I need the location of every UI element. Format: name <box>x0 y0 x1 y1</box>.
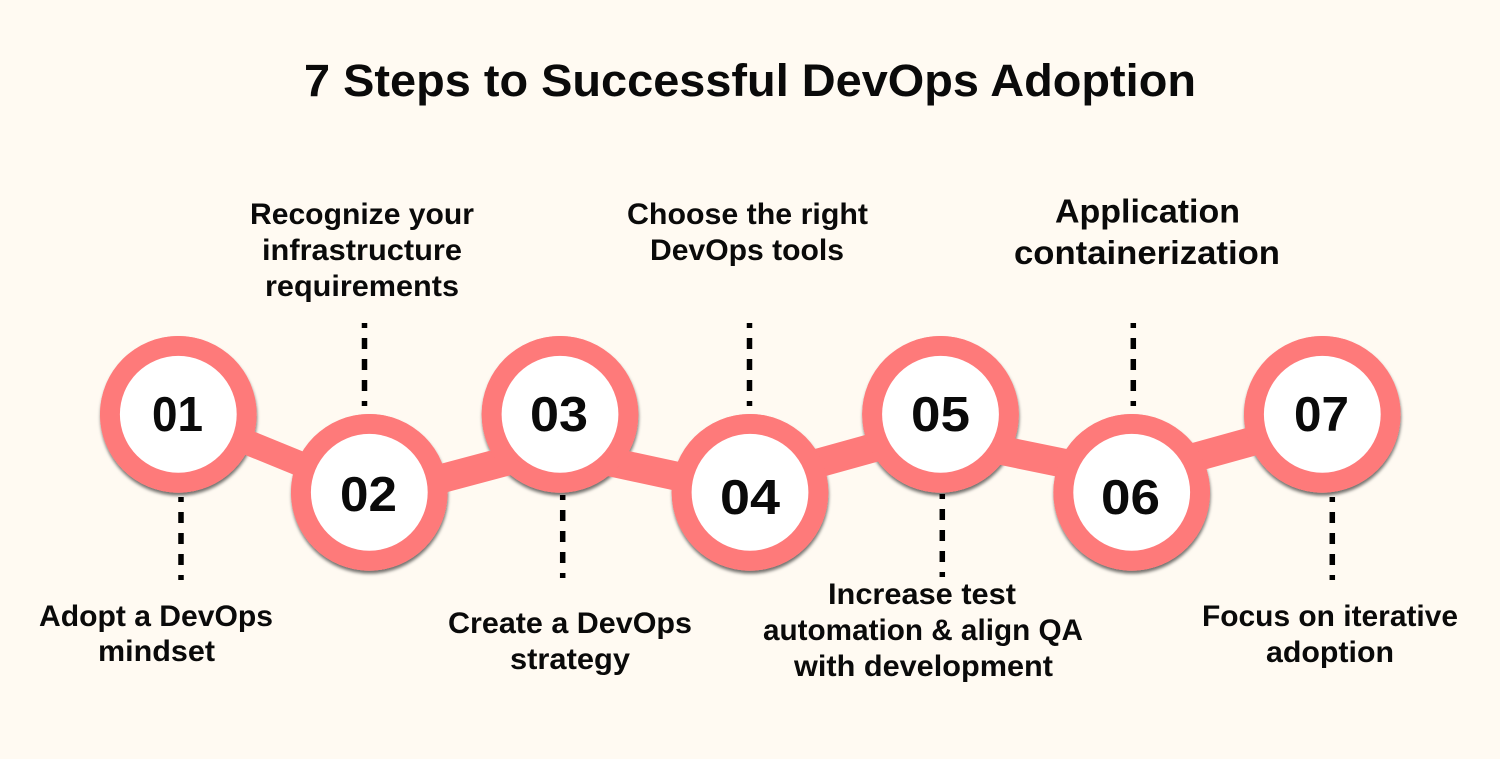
label: step 6 <box>1014 192 1280 271</box>
label: step 4: DevOps tools <box>650 234 844 267</box>
label: step 3 <box>448 607 692 676</box>
label: step 5: automation & align QA <box>763 614 1083 647</box>
label: step 5 <box>763 578 1083 683</box>
step numbers: 04 <box>720 471 780 525</box>
step numbers: 01 <box>152 388 203 442</box>
label: step 5: Increase test <box>828 578 1016 611</box>
label: step 1: mindset <box>98 635 215 668</box>
label: step 7: Focus on iterative <box>1202 600 1458 633</box>
step numbers <box>152 388 1349 525</box>
label: step 7: adoption <box>1266 636 1394 669</box>
dotted leader lines <box>181 323 1332 580</box>
label: step 2: Recognize your <box>250 198 475 231</box>
label: step 1: Adopt a DevOps <box>39 600 273 633</box>
label: step 3: Create a DevOps <box>448 607 692 640</box>
label: step 2: infrastructure <box>262 234 462 267</box>
timeline: circles and connectors <box>100 336 1401 571</box>
label: step 5: with development <box>793 650 1053 683</box>
label: step 6: containerization <box>1014 234 1280 271</box>
step numbers: 02 <box>340 468 397 522</box>
label: step 7 <box>1202 600 1458 669</box>
title: 7 Steps to Successful DevOps Adoption <box>304 55 1196 106</box>
step numbers: 03 <box>530 388 588 442</box>
label: step 1 <box>39 600 273 668</box>
step numbers: 05 <box>911 388 970 442</box>
label: step 2: requirements <box>265 270 459 303</box>
label: step 2 <box>250 198 475 303</box>
step numbers: 06 <box>1101 471 1160 525</box>
label: step 3: strategy <box>510 643 631 676</box>
label: step 6: Application <box>1055 192 1240 230</box>
label: step 4 <box>627 198 868 267</box>
label: step 4: Choose the right <box>627 198 868 231</box>
step numbers: 07 <box>1294 388 1349 442</box>
